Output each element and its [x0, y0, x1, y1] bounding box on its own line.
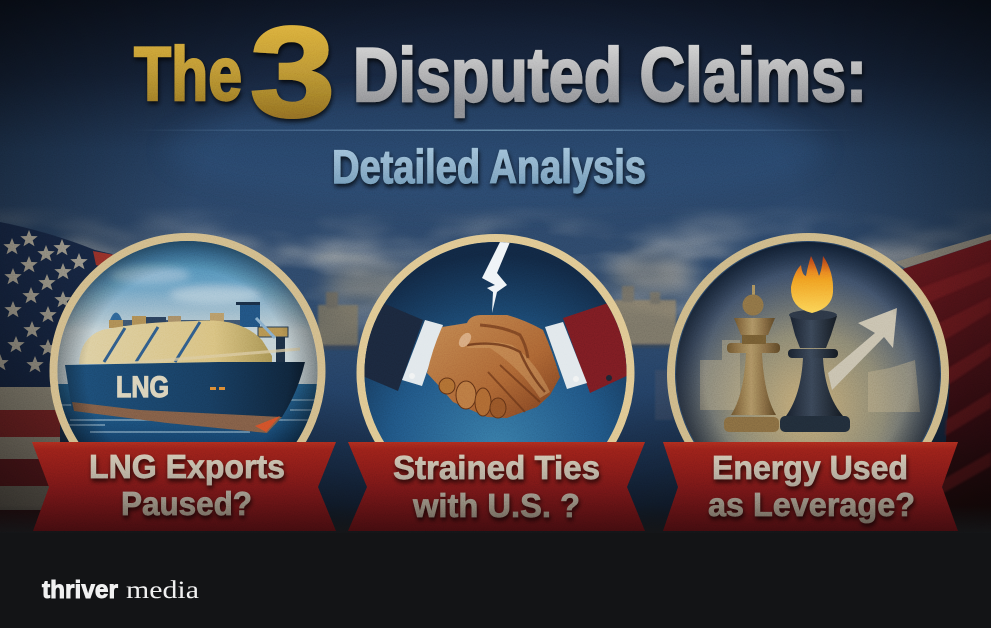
panel: LNG exports [50, 233, 326, 442]
ship hull [65, 362, 305, 433]
illustration: chess pieces with flame and rising arrow [676, 242, 940, 442]
ribbon text 1 [89, 448, 285, 522]
right red sleeve [563, 304, 626, 393]
ribbon text 3: Energy Used [712, 449, 908, 486]
ribbon text 1: Paused? [121, 485, 252, 522]
background city skyline left [318, 292, 358, 350]
lightning bolt [482, 242, 510, 313]
red flag right [895, 234, 991, 532]
clasped hands [427, 315, 560, 418]
panel: strained ties [356, 234, 634, 442]
illustration: LNG tanker at sea [58, 241, 318, 442]
hull label: LNG: LNG [116, 371, 169, 404]
American flag left [0, 222, 115, 532]
ribbon text 2: with U.S. ? [412, 487, 580, 524]
medallion ring 3 [671, 237, 945, 511]
title word: The: The [134, 32, 242, 117]
footer logo: thriver media: media [126, 577, 199, 604]
left navy sleeve [364, 304, 423, 391]
ribbon text 3 [708, 449, 915, 523]
rising arrow [828, 308, 897, 390]
background clouds [0, 205, 991, 350]
title numeral: 3: 3 [250, 1, 335, 144]
panel: energy leverage [667, 233, 949, 442]
title: The 3 Disputed Claims [134, 1, 867, 144]
dark chess piece with flame top [780, 310, 850, 432]
right shirt cuff [545, 322, 587, 389]
LNG storage tanks [79, 320, 300, 364]
background city skyline centre right [614, 286, 676, 420]
footer logo: thriver media [42, 576, 199, 604]
footer logo: thriver media: thriver [42, 576, 118, 604]
ribbon text 2: Strained Ties [393, 449, 600, 486]
subtitle: Detailed Analysis: Detailed Analysis [332, 140, 646, 193]
ribbon 1: LNG Exports Paused? [32, 442, 336, 531]
ribbon text 2 [393, 449, 600, 524]
flame [791, 256, 833, 313]
medallion ring 2 [360, 238, 630, 508]
ribbon 2: Strained Ties with U.S. ? [348, 442, 645, 531]
left shirt cuff [402, 320, 443, 386]
gold chess piece [724, 285, 780, 432]
faded city silhouettes [700, 340, 920, 412]
ribbon text 3: as Leverage? [708, 486, 915, 523]
medallion ring 1 [54, 237, 322, 505]
ribbon text 1: LNG Exports [89, 448, 285, 485]
ship superstructure [109, 302, 288, 365]
illustration: handshake with lightning [364, 242, 626, 442]
title words: Disputed Claims: Disputed Claims: [353, 33, 867, 118]
ribbon 3: Energy Used as Leverage? [663, 442, 958, 531]
